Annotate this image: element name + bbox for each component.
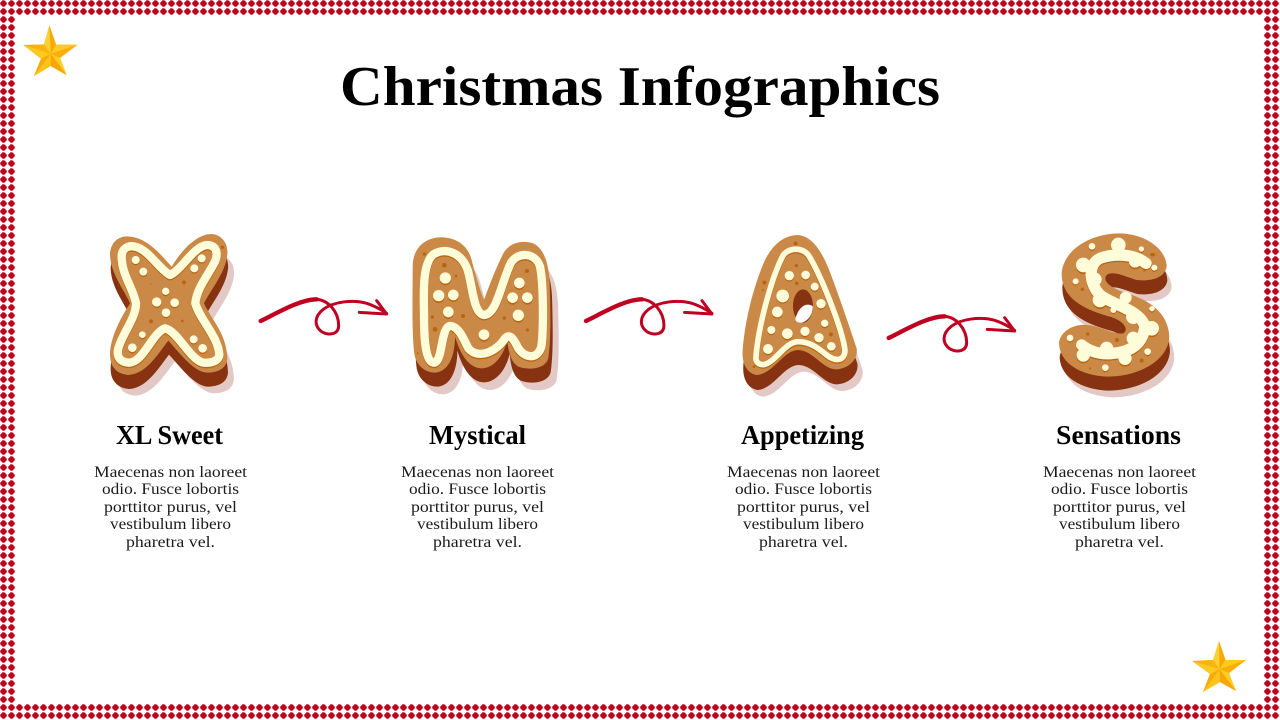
text block: Appetizing description: vestibulum libero [743,516,864,533]
title: Christmas Infographics [340,56,940,118]
text block: Sensations description: Maecenas non laoreet [1043,464,1197,481]
arrow: X to M [261,299,387,334]
text block: XL Sweet description: pharetra vel. [126,534,215,551]
heading: Mystical: Mystical [429,420,526,450]
text block: XL Sweet description [94,464,248,551]
text block: Mystical description: vestibulum libero [417,516,538,533]
text block: XL Sweet description: Maecenas non laoreet [94,464,248,481]
text block: Appetizing description: pharetra vel. [759,534,848,551]
icon: gingerbread letter X [110,234,234,396]
heading: XL Sweet: XL Sweet [116,420,223,450]
text block: Mystical description: Maecenas non laoreet [401,464,555,481]
text block: Mystical description: pharetra vel. [433,534,522,551]
text block: Appetizing description: Maecenas non laoreet [727,464,881,481]
text block: Sensations description: vestibulum libero [1059,516,1180,533]
text block: Sensations description: pharetra vel. [1075,534,1164,551]
text block: XL Sweet description: vestibulum libero [110,516,231,533]
arrow: M to A [586,299,712,334]
heading: Appetizing: Appetizing [741,420,864,450]
text block: Appetizing description: odio. Fusce lobortis [735,481,872,498]
icon: gingerbread letter A [743,235,863,397]
icon: gingerbread letter S [1059,233,1174,397]
icon: gingerbread letter M [412,237,559,394]
icon: gold star bottom right [1192,641,1246,692]
text block: Sensations description: odio. Fusce lobortis [1051,481,1188,498]
text block: Mystical description [401,464,555,551]
text block: Appetizing description: porttitor purus, vel [737,499,871,516]
text block: Mystical description: porttitor purus, vel [411,499,545,516]
text block: Appetizing description [727,464,881,551]
heading: Sensations: Sensations [1056,420,1181,450]
text block: Sensations description: porttitor purus, vel [1053,499,1187,516]
text block: Sensations description [1043,464,1197,551]
text block: XL Sweet description: porttitor purus, vel [104,499,238,516]
arrow: A to S [889,316,1015,351]
text block: Mystical description: odio. Fusce lobortis [409,481,546,498]
text block: XL Sweet description: odio. Fusce lobortis [102,481,239,498]
icon: gold star top left [23,25,77,76]
